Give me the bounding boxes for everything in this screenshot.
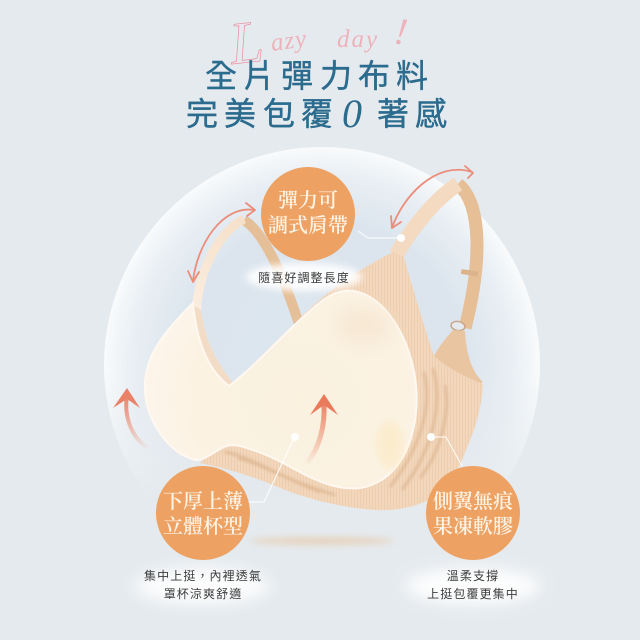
- glow: right caption: [405, 568, 541, 604]
- glow: top caption: [246, 263, 362, 291]
- callout: side wing: 果凍軟膠: [433, 515, 513, 538]
- callout: cup shape: 下厚上薄: [163, 490, 243, 513]
- caption: cup: [144, 568, 262, 601]
- arrow: left cup lift: [113, 388, 147, 448]
- left back strap: [244, 220, 299, 324]
- arrow: right strap: [391, 166, 473, 228]
- body rib texture: [200, 252, 483, 510]
- dot: side wing: [427, 433, 435, 441]
- floor shadow: [250, 538, 394, 544]
- side bone shading: [225, 368, 446, 495]
- right back strap: [458, 184, 477, 328]
- title line 2: 完美包覆著感: [186, 96, 447, 132]
- body panel: [200, 252, 483, 510]
- caption: side wing: 上挺包覆更集中: [427, 586, 519, 601]
- background disc: [104, 147, 540, 446]
- script text: exclamation: !: [392, 10, 410, 54]
- cups: [145, 291, 417, 488]
- callout: cup shape: 立體杯型: [163, 515, 243, 538]
- callout: adjustable strap: 調式肩帶: [268, 214, 348, 237]
- arrow: right cup lift: [306, 394, 338, 464]
- dot: strap: [397, 234, 405, 242]
- product: bra illustration: [145, 184, 483, 510]
- strap slider: [461, 269, 478, 276]
- caption: cup: 罩杯涼爽舒適: [164, 586, 242, 601]
- callout leaders and dots: [248, 231, 462, 502]
- D ring: [450, 320, 466, 332]
- glow: left caption: [134, 568, 270, 604]
- title line 1: 全片彈力布料: [205, 58, 428, 94]
- arrow: left strap: [188, 203, 255, 282]
- right front strap: [396, 184, 458, 255]
- left front strap: [197, 219, 244, 322]
- callout: side wing: [426, 466, 520, 560]
- title zero: 0: [342, 91, 362, 136]
- cup inner glow: [376, 421, 404, 469]
- callout: adjustable strap: [261, 167, 355, 261]
- callout: side wing: 側翼無痕: [433, 490, 513, 513]
- cup upper rib shade: [337, 307, 393, 343]
- script text: azy: azy: [269, 25, 309, 57]
- left neckline trim: [192, 305, 234, 386]
- callout: adjustable strap: 彈力可: [278, 189, 338, 212]
- dot: cup: [291, 433, 299, 441]
- caption: side wing: 溫柔支撐: [447, 569, 499, 583]
- caption: cup: 集中上挺，內裡透氣: [144, 568, 262, 583]
- script text: L: L: [225, 8, 267, 77]
- title script: [225, 8, 410, 77]
- script text: day: day: [337, 26, 379, 53]
- side wing back: [433, 330, 483, 388]
- callout: cup shape: [156, 466, 250, 560]
- caption: side wing: [427, 569, 519, 601]
- caption: strap: 隨喜好調整長度: [258, 270, 350, 285]
